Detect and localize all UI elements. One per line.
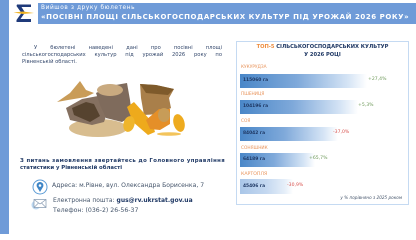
label: картопля: КАРТОПЛЯ — [241, 172, 267, 177]
header subtitle: Вийшов з друку бюлетень — [41, 4, 135, 10]
panel: top-5 crops — [236, 41, 409, 205]
change: соя: -37,0% — [333, 130, 349, 135]
value: соя: 84042 га — [243, 131, 265, 136]
icon: envelope — [32, 199, 46, 210]
bar: пшениця — [240, 100, 358, 114]
value: картопля: 45406 га — [243, 184, 265, 189]
bar: кукурудза — [240, 74, 367, 88]
phone: Телефон: (036-2) 26-56-37 — [53, 206, 138, 214]
contact heading: З питань замовлення звертайтесь до Головного управління — [20, 158, 225, 164]
contact heading — [20, 158, 225, 171]
icon: location pin — [32, 180, 48, 194]
header title: «ПОСІВНІ ПЛОЩІ СІЛЬСЬКОГОСПОДАРСЬКИХ КУЛЬТУР ПІД УРОЖАЙ 2026 РОКУ» — [41, 12, 409, 20]
illustration: grain sacks and corn — [57, 81, 185, 137]
value: пшениця: 104196 га — [243, 104, 268, 109]
label: кукурудза: КУКУРУДЗА — [241, 65, 267, 70]
chart footnote: у % порівняно з 2025 роком — [340, 194, 402, 200]
change: картопля: -30,9% — [287, 183, 303, 188]
value: кукурудза: 115060 га — [243, 78, 268, 83]
contact heading: статистики у Рівненській області — [20, 165, 122, 171]
chart title: ТОП-5 СІЛЬСЬКОГОСПОДАРСЬКИХ КУЛЬТУР — [257, 44, 388, 50]
value: соняшник: 64189 га — [243, 157, 265, 162]
intro text: У бюлетені наведені дані про посівні площі — [34, 45, 222, 51]
label: соя: СОЯ — [241, 119, 250, 124]
email: Електронна пошта: gus@rv.ukrstat.gov.ua — [53, 197, 193, 204]
bar: соняшник — [240, 153, 315, 167]
intro text: Рівненській області. — [22, 59, 77, 65]
bar: картопля — [240, 179, 293, 194]
left accent strip — [0, 0, 9, 234]
header bar — [38, 3, 416, 24]
bar: соя — [240, 127, 338, 141]
address: Адреса: м.Рівне, вул. Олександра Борисенка, 7 — [52, 182, 204, 189]
intro text — [22, 45, 222, 65]
chart title — [256, 44, 388, 58]
change: пшениця: +5,3% — [358, 103, 374, 108]
label: соняшник: СОНЯШНИК — [241, 146, 268, 151]
change: соняшник: +65,7% — [309, 156, 327, 161]
chart title: У 2026 РОЦІ — [304, 52, 341, 58]
change: кукурудза: +27,4% — [368, 77, 386, 82]
intro text: сільськогосподарських культур під урожай 2026 року по — [22, 52, 222, 58]
icon: sigma logo — [14, 4, 34, 22]
label: пшениця: ПШЕНИЦЯ — [241, 92, 264, 97]
